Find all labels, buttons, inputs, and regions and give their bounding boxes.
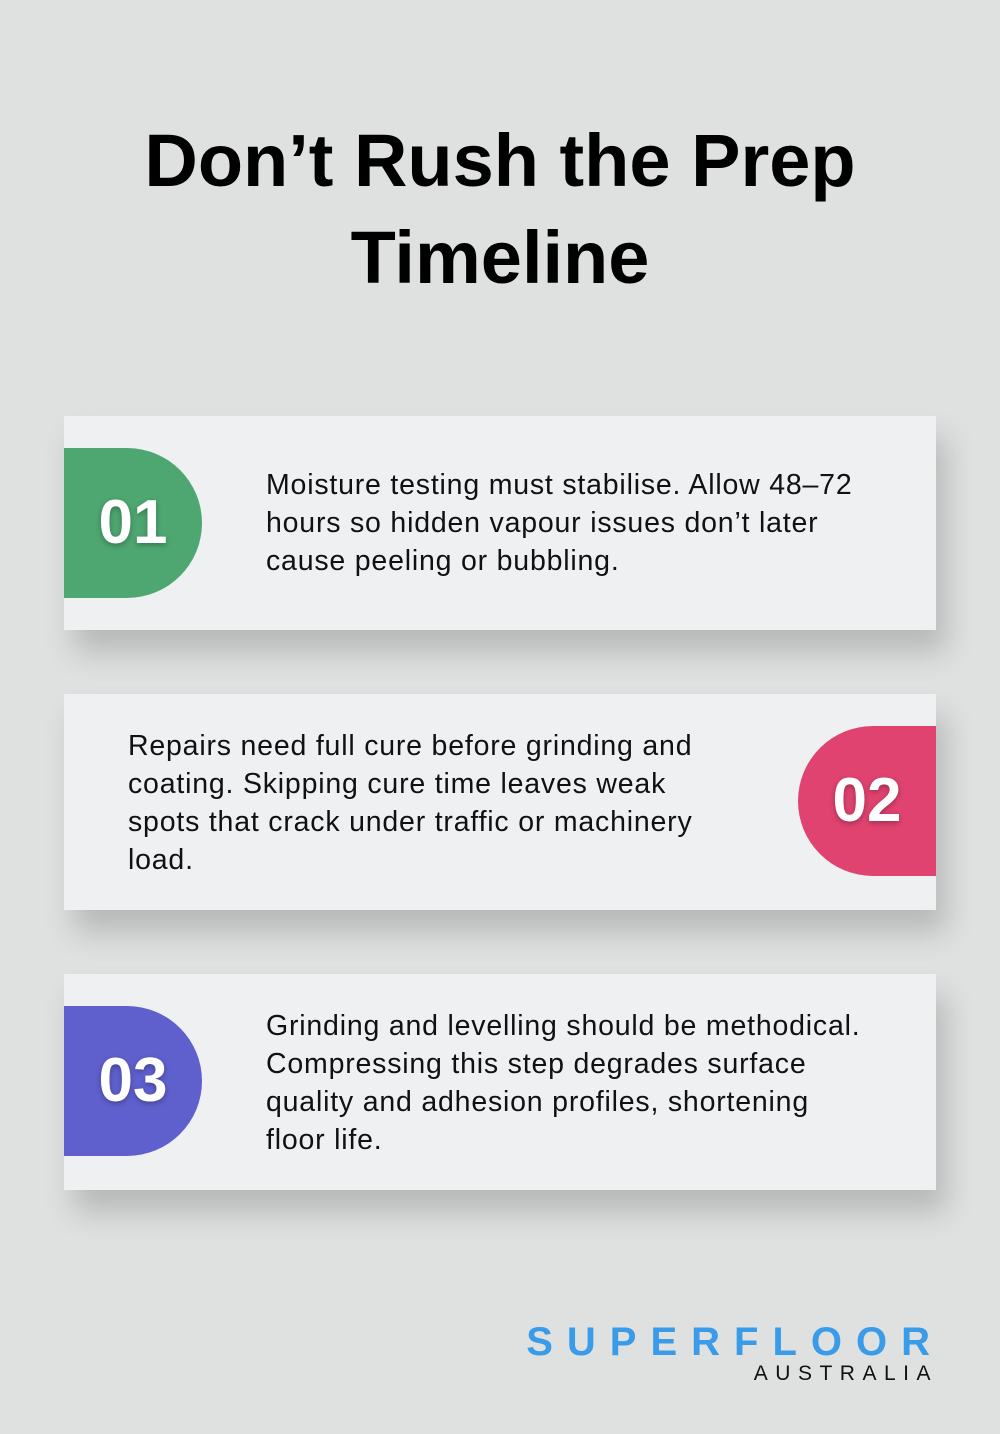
badge 02 [798,726,936,876]
text 03 [266,1010,860,1156]
badge 02: 02 [833,766,901,835]
badge 03 [64,1006,202,1156]
logo: AUSTRALIA [754,1362,938,1385]
text 02: load. [128,844,194,876]
text 03: Compressing this step degrades surface [266,1048,806,1080]
text 03: floor life. [266,1124,383,1156]
text 02 [128,730,693,876]
text 02: Repairs need full cure before grinding and [128,730,692,762]
panel: step 01 [64,416,936,630]
text 02: spots that crack under traffic or machinery [128,806,693,838]
title: Don’t Rush the Prep [144,119,856,202]
title [144,119,856,299]
panel: step 02 [64,694,936,910]
logo [526,1320,944,1385]
text 02: coating. Skipping cure time leaves weak [128,768,666,800]
logo: SUPERFLOOR [526,1320,944,1364]
badge 01 [64,448,202,598]
title: Timeline [351,216,649,299]
badge 03: 03 [99,1046,167,1115]
text 01 [266,469,852,577]
text 01: cause peeling or bubbling. [266,545,620,577]
text 03: Grinding and levelling should be methodical. [266,1010,860,1042]
text 01: Moisture testing must stabilise. Allow 48–72 [266,469,852,501]
text 01: hours so hidden vapour issues don’t later [266,507,818,539]
badge 01: 01 [99,488,167,557]
panel: step 03 [64,974,936,1190]
text 03: quality and adhesion profiles, shortening [266,1086,809,1118]
